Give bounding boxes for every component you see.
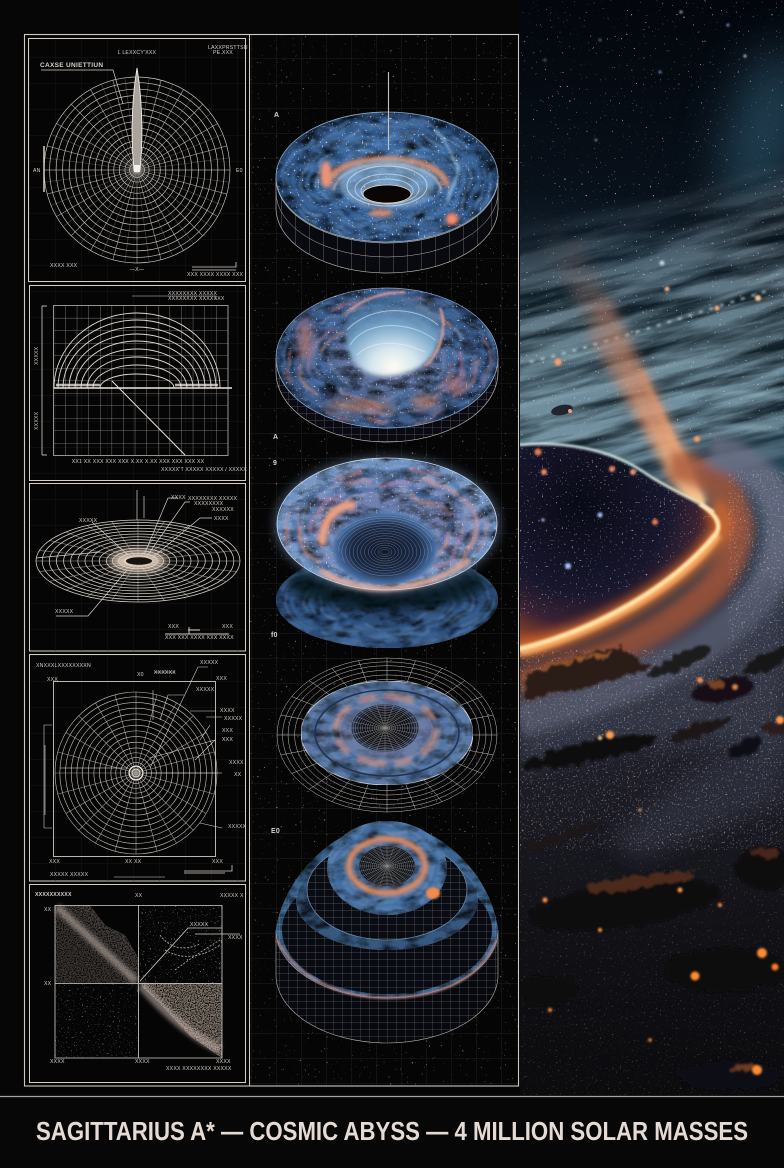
- disk 1 surface: [276, 112, 498, 242]
- panel 5 curves: [160, 935, 220, 970]
- disk 3 speckle: [277, 458, 497, 590]
- disk 3 upper surface: [277, 458, 497, 590]
- panel 5 labels: XX: [44, 907, 52, 913]
- jet spike: [132, 68, 142, 170]
- disk 1 wall wire: [276, 192, 498, 272]
- disk 1 hole: [363, 185, 411, 203]
- panel 3 labels: XXXX: [171, 495, 186, 501]
- panel 2 labels: XXXXXXXX XXXXXXX: [168, 296, 225, 302]
- panel 5 labels: XX: [135, 893, 143, 899]
- panel 4 labels: XXXXX: [196, 687, 215, 693]
- panel 1 labels: AN: [33, 168, 41, 174]
- disk 4 swirl streaks: [304, 683, 470, 783]
- disk 2 swirl streaks: [281, 291, 493, 425]
- disk 4 outer wire ring: [277, 658, 497, 812]
- disk 5 hot spot: [426, 887, 440, 899]
- panel 1 labels: L LEXXCY'XXX: [118, 50, 157, 56]
- panel 4 labels: XXX: [222, 728, 233, 734]
- orange swirl around the horizon: [519, 452, 781, 720]
- panel 2 labels: XXXXX: [34, 346, 40, 365]
- panel 3 labels: XXX: [168, 624, 179, 630]
- disk 5 cylinder wall: [276, 930, 498, 1043]
- panel 5 labels: XXXXXXXXXX: [35, 892, 72, 898]
- panel 4 labels: XXX: [49, 859, 60, 865]
- outer blueprint frame: [24, 34, 518, 1086]
- bright stars: [544, 11, 761, 442]
- disk 1 axis line: [388, 72, 390, 150]
- disk 3 warm swirl: [320, 498, 477, 589]
- panel 4 labels: XXXXXX: [154, 670, 176, 676]
- glowing embers: [542, 677, 784, 1075]
- disk 4 orange ring: [339, 697, 433, 763]
- disk 5: tiered dome with cylinder base: [276, 821, 498, 1045]
- panel 5 labels: XXXXX X: [220, 893, 244, 899]
- disk 1: dark funnel with wire wall: [276, 72, 498, 280]
- panel 4 labels: XXXXX: [228, 824, 247, 830]
- panel 3 labels: XXXXX: [55, 609, 74, 615]
- disk 3 outer glow: [274, 456, 500, 592]
- disk 5 dark wire tier: [282, 866, 492, 994]
- panel 3 labels: XXXXXXXX XXXXX: [188, 496, 238, 502]
- panel 2: dome chart: [30, 286, 247, 480]
- panel 2 labels: XXXXXXXX XXXXX: [168, 291, 218, 297]
- orange relativistic jet: [556, 244, 713, 506]
- disk 1 glow ring: [327, 159, 447, 190]
- panel 5 labels: XXXXX: [190, 922, 209, 928]
- panel 4 labels: XXXX: [229, 760, 244, 766]
- disk 1 funnel: [339, 159, 435, 209]
- panel 1 labels: XXXX XXX: [50, 263, 78, 269]
- panel 4 labels: [36, 660, 247, 878]
- panel 3 labels: XXXX: [214, 516, 229, 522]
- center column grid: [250, 35, 518, 1086]
- midline axis and diagonal leader: [42, 306, 232, 455]
- disk index labels: f0: [271, 632, 278, 639]
- disk 5 swirl streaks: [329, 823, 445, 913]
- polar grid: [33, 66, 241, 274]
- disk index labels: A: [274, 112, 279, 119]
- disk 4: wire ring and inner ring: [277, 658, 497, 812]
- disk 5 orange ring: [349, 839, 425, 893]
- panel 4 labels: XNXXXLXXXXXXXXN: [36, 663, 91, 669]
- panel 3 labels: XXX XXX XXXX XXX XXXX: [165, 635, 234, 641]
- disk 3 swirl streaks: [281, 463, 493, 590]
- sphere accents: [534, 448, 658, 569]
- panel 3 labels: [55, 495, 238, 641]
- panel 5 labels: XXXX XXXXXXXX XXXXX: [166, 1066, 232, 1072]
- disk 5 blue band: [296, 850, 478, 950]
- panel 3 labels: XXXXXX: [212, 507, 234, 513]
- panel 5 labels: XXXX: [135, 1059, 150, 1065]
- panel 5: scatter matrix: [30, 884, 246, 1082]
- panel 2 labels: [34, 291, 247, 473]
- disk core: [110, 550, 166, 572]
- disk 4 inner surface: [301, 681, 473, 785]
- sphere stars: [519, 444, 714, 620]
- panel 4 labels: XXXXX: [200, 660, 219, 666]
- teal cloud bands: [520, 169, 784, 484]
- black hole sphere: [519, 444, 723, 648]
- disk 3 lower plate: [276, 552, 498, 648]
- panel 1: polar jet diagram: [28, 38, 248, 282]
- nebula haze top right: [599, 31, 784, 276]
- panel 4 labels: XXXXX: [224, 716, 243, 722]
- panel: deep-space illustration: [520, 0, 784, 1096]
- disk wireframe: [36, 520, 240, 602]
- panel 4 labels: XX: [234, 772, 242, 778]
- accretion arc: [519, 444, 722, 652]
- lower debris field: [519, 470, 784, 1096]
- panel 1 labels: CAXSE UNIETTIUN: [40, 62, 103, 69]
- disk 5 dome silhouette: [276, 824, 498, 998]
- center column stars: [250, 35, 518, 1086]
- axes: [55, 905, 240, 1058]
- disk 1 swirl streaks: [283, 120, 491, 240]
- panel 3 labels: XXXXXXXX: [194, 501, 224, 507]
- panel 3: accretion disk plan: [30, 484, 246, 651]
- panel 4 labels: XXX: [47, 677, 58, 683]
- disk 2 speckle: [276, 288, 498, 428]
- panel 1 labels: [33, 45, 248, 278]
- core rings: [60, 766, 222, 780]
- disk 5 core: [359, 846, 415, 886]
- disk 5 inner wire tier: [307, 840, 467, 940]
- square axes: [54, 682, 216, 856]
- panel 1 labels: E0: [236, 168, 243, 174]
- panel 3 labels: XXXXX: [79, 518, 98, 524]
- disk 5 rim: [277, 940, 497, 998]
- disk index labels: E0: [271, 828, 280, 835]
- rock clusters: [515, 638, 784, 1089]
- sparse quadrants: [138, 905, 222, 983]
- panel 1 labels: XXX XXXX XXXX XXX: [187, 272, 244, 278]
- disk 2 warm patches: [299, 318, 465, 410]
- panel 1 labels: PE.XXX: [213, 50, 233, 56]
- panel 4 labels: X0: [137, 672, 144, 678]
- leader lines: [36, 490, 212, 616]
- disk index labels: 9: [273, 460, 277, 467]
- chart grid: [54, 306, 228, 456]
- disk 2: bright funnel: [276, 288, 498, 450]
- panel 3 labels: XXX: [222, 624, 233, 630]
- disk 2 wall wire: [276, 371, 498, 442]
- disk 1 hot spots: [320, 161, 458, 225]
- panel 4 labels: XXXX: [220, 708, 235, 714]
- panel 4: polar schematic: [30, 654, 247, 881]
- disk 1 speckle: [276, 112, 498, 242]
- panel 5 labels: XXXX: [50, 1059, 65, 1065]
- leader lines: [44, 667, 222, 828]
- disk 5 top tier: [327, 821, 447, 915]
- panel: schematics column background: [25, 35, 249, 1086]
- disk 3: deep funnel on lower plate: [274, 456, 500, 648]
- title band: [0, 1096, 784, 1168]
- panel 2 labels: XX1 XX XXX XXX XXX X.XX X.XX XXX XXX XXX XX: [72, 459, 205, 465]
- upper-left density: [55, 905, 138, 983]
- panel 5 labels: [35, 892, 244, 1072]
- panel 5 labels: XXXX: [228, 935, 243, 941]
- dome contours: [54, 312, 220, 388]
- starfield: [519, 0, 784, 440]
- panel 4 labels: XXXXX XXXXX: [50, 872, 89, 878]
- disk index labels: A: [273, 434, 278, 441]
- panel 5 labels: XXXX: [216, 1059, 231, 1065]
- panel 4 labels: XXX: [216, 676, 227, 682]
- disk 2 funnel: [345, 296, 442, 376]
- panel 4 labels: XXX: [212, 859, 223, 865]
- panel 1 labels: LAXXPRSTTSU: [208, 45, 248, 51]
- lower-right density: [138, 983, 222, 1058]
- disk 3 funnel: [327, 505, 443, 585]
- panel 1 labels: —X—: [130, 267, 145, 273]
- disk 2 surface: [276, 288, 498, 428]
- disk index labels: [271, 112, 280, 835]
- panel 2 labels: XXXXX'T XXXXX XXXXX / XXXXX: [161, 467, 247, 473]
- panel 5 labels: XX: [44, 981, 52, 987]
- panel 4 labels: XX XX: [125, 859, 142, 865]
- disk 4 hole: [351, 704, 419, 752]
- panel 2 labels: XXXXX: [34, 411, 40, 430]
- panel 4 labels: XXX: [222, 737, 233, 743]
- polar wireframe: [55, 692, 217, 854]
- disk 2 pink rim: [350, 292, 443, 366]
